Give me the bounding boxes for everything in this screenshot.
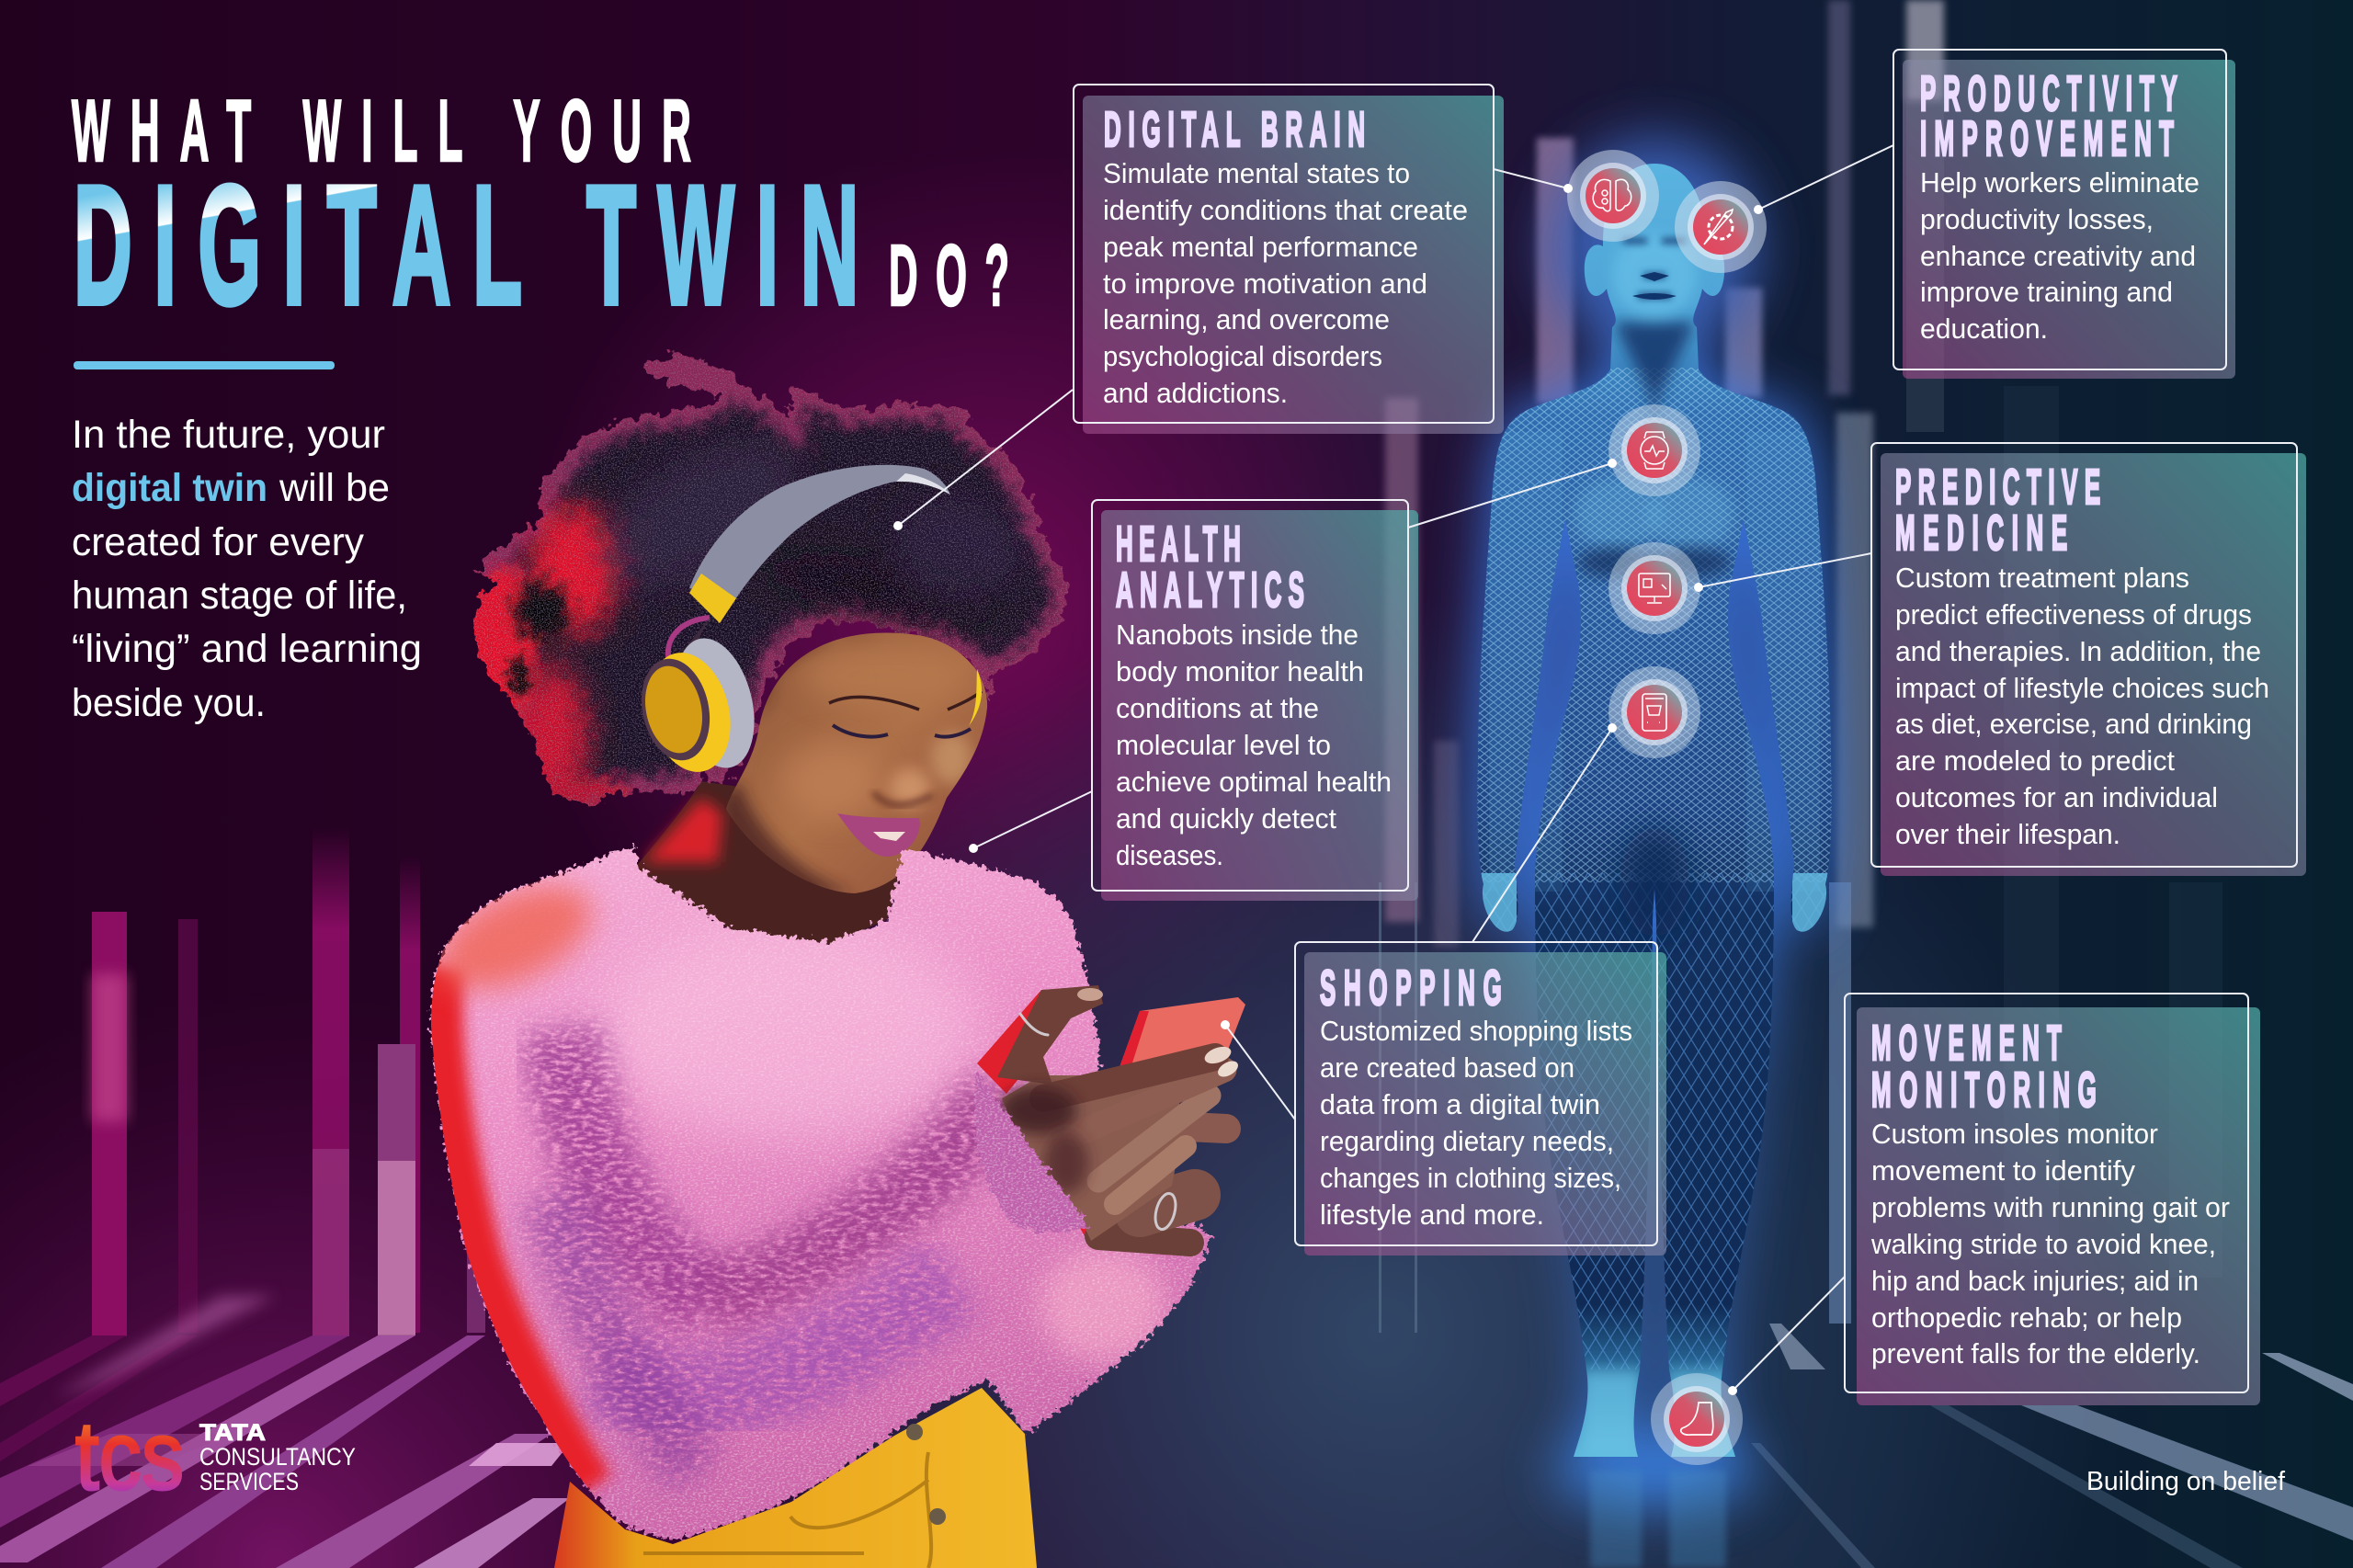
sweater shading xyxy=(422,864,1002,1489)
heading: movement monitoring: MONITORING xyxy=(1871,1062,2097,1117)
icon node: movement foot xyxy=(1651,1373,1743,1465)
logo wordmark xyxy=(199,1420,356,1495)
neck xyxy=(634,781,905,945)
eyebrows xyxy=(829,691,982,710)
text: predictive medicine: are modeled to predict xyxy=(1895,744,2175,777)
text: health analytics: and quickly detect xyxy=(1116,802,1336,835)
face xyxy=(726,632,987,893)
text: movement monitoring: orthopedic rehab; or help xyxy=(1871,1301,2182,1334)
text: movement monitoring: problems with running gait or xyxy=(1871,1191,2230,1223)
panel: predictive medicine xyxy=(1871,443,2306,876)
heading: predictive medicine: PREDICTIVE xyxy=(1895,460,2100,514)
text: predictive medicine: as diet, exercise, and drinking xyxy=(1895,708,2252,740)
jeans xyxy=(554,1388,1037,1568)
text: shopping: are created based on xyxy=(1320,1051,1574,1084)
icon node: digital brain xyxy=(1567,150,1659,242)
icon node: predictive medicine xyxy=(1608,542,1700,634)
hair xyxy=(467,355,1071,807)
text: predictive medicine: predict effectiveness of drugs xyxy=(1895,598,2252,631)
text: digital brain: psychological disorders xyxy=(1103,340,1382,372)
woman with headphones xyxy=(422,355,1245,1568)
text: productivity improvement: improve training and xyxy=(1920,276,2173,308)
text: movement monitoring: Custom insoles monitor xyxy=(1871,1118,2158,1150)
heading: shopping: SHOPPING xyxy=(1320,960,1502,1015)
text: shopping: regarding dietary needs, xyxy=(1320,1125,1614,1157)
icon node: productivity xyxy=(1675,181,1767,273)
title line 2: DIGITAL TWIN xyxy=(74,150,858,340)
intro text: “living” and learning xyxy=(72,627,422,671)
panel: health analytics xyxy=(1092,500,1418,901)
heading: digital brain: DIGITAL BRAIN xyxy=(1104,102,1365,156)
digital twin body figure xyxy=(1452,138,1857,1568)
intro text xyxy=(72,413,422,725)
band yellow tip xyxy=(689,574,736,623)
text: shopping xyxy=(1320,1015,1632,1231)
text: shopping: data from a digital twin xyxy=(1320,1088,1600,1120)
text: health analytics: body monitor health xyxy=(1116,655,1364,687)
text: digital brain: to improve motivation and xyxy=(1103,267,1427,300)
lips xyxy=(837,813,920,857)
icon node: health analytics xyxy=(1608,404,1700,496)
ear cup xyxy=(636,644,743,780)
text: shopping: lifestyle and more. xyxy=(1320,1199,1544,1231)
headband xyxy=(689,465,950,599)
body glow xyxy=(1477,138,1832,1507)
intro text: In the future, your xyxy=(72,413,385,457)
phone xyxy=(977,990,1245,1236)
text: predictive medicine: over their lifespan. xyxy=(1895,818,2120,850)
eyes xyxy=(833,725,971,737)
text: digital brain: identify conditions that create xyxy=(1103,194,1468,226)
logo wordmark: CONSULTANCY xyxy=(199,1443,356,1471)
ear cushion xyxy=(664,630,767,777)
text: health analytics xyxy=(1116,619,1392,871)
panel: movement monitoring xyxy=(1845,994,2260,1405)
heading: health analytics: ANALYTICS xyxy=(1116,562,1304,617)
text: predictive medicine: Custom treatment plans xyxy=(1895,562,2189,594)
heading: predictive medicine: MEDICINE xyxy=(1895,506,2067,560)
text: movement monitoring: hip and back injuries; aid in xyxy=(1871,1265,2199,1297)
heading: productivity improvement: PRODUCTIVITY xyxy=(1920,66,2177,120)
intro text: will be xyxy=(278,466,390,510)
intro text: digital twin xyxy=(72,466,267,510)
panel: productivity improvement xyxy=(1893,50,2235,379)
right floor stripes xyxy=(1751,1324,2353,1568)
cuff xyxy=(973,1071,1089,1232)
text: digital brain xyxy=(1103,157,1468,409)
logo wordmark: TATA xyxy=(199,1420,266,1446)
heading: productivity improvement xyxy=(1920,66,2177,165)
text: predictive medicine: outcomes for an individual xyxy=(1895,781,2218,813)
yellow far earcup xyxy=(969,669,982,726)
text: predictive medicine: impact of lifestyle choices such xyxy=(1895,672,2269,704)
text: productivity improvement xyxy=(1920,166,2200,345)
text: shopping: Customized shopping lists xyxy=(1320,1015,1632,1047)
text: productivity improvement: enhance creativity and xyxy=(1920,240,2196,272)
heading: productivity improvement: IMPROVEMENT xyxy=(1920,111,2174,165)
heading: movement monitoring: MOVEMENT xyxy=(1871,1016,2062,1070)
text: health analytics: conditions at the xyxy=(1116,692,1319,724)
sweater xyxy=(431,846,1211,1540)
text: productivity improvement: education. xyxy=(1920,312,2048,345)
hand xyxy=(997,985,1241,1243)
text: digital brain: Simulate mental states to xyxy=(1103,157,1410,189)
intro text: human stage of life, xyxy=(72,574,407,618)
body mesh xyxy=(1477,164,1832,1457)
text: predictive medicine xyxy=(1895,562,2269,850)
hinge xyxy=(668,618,710,662)
intro text: beside you. xyxy=(72,681,266,725)
heading: health analytics xyxy=(1116,517,1304,617)
text: digital brain: learning, and overcome xyxy=(1103,303,1390,335)
text: shopping: changes in clothing sizes, xyxy=(1320,1162,1621,1194)
text: productivity improvement: productivity losses, xyxy=(1920,203,2154,235)
icon node: shopping xyxy=(1608,666,1700,758)
heading: movement monitoring xyxy=(1871,1016,2097,1117)
text: movement monitoring: movement to identify xyxy=(1871,1154,2135,1187)
panel: shopping xyxy=(1295,942,1666,1256)
text: health analytics: molecular level to xyxy=(1116,729,1331,761)
title line 3: DO? xyxy=(889,226,1009,324)
text: health analytics: diseases. xyxy=(1116,839,1223,871)
title underline xyxy=(74,361,335,369)
text: movement monitoring xyxy=(1870,1118,2230,1369)
title xyxy=(72,81,1009,340)
text: movement monitoring: walking stride to avoid knee, xyxy=(1870,1228,2216,1260)
headphones xyxy=(632,465,950,780)
text: digital brain: peak mental performance xyxy=(1103,231,1418,263)
logo wordmark: SERVICES xyxy=(199,1468,299,1495)
logo: tcs xyxy=(75,1402,356,1510)
left floor stripes xyxy=(0,1296,570,1568)
panel: digital brain xyxy=(1074,85,1504,434)
body reflection xyxy=(1590,1471,1726,1568)
text: health analytics: achieve optimal health xyxy=(1116,766,1392,798)
nose xyxy=(873,792,933,805)
text: health analytics: Nanobots inside the xyxy=(1116,619,1358,651)
text: predictive medicine: and therapies. In addition, the xyxy=(1895,635,2261,667)
leader lines xyxy=(893,145,1893,1395)
intro text: created for every xyxy=(72,520,364,564)
left vertical light bars xyxy=(92,827,485,1336)
text: movement monitoring: prevent falls for the elderly. xyxy=(1871,1337,2200,1369)
heading: predictive medicine xyxy=(1895,460,2100,560)
title line 1: WHAT WILL YOUR xyxy=(72,81,691,180)
tagline: Building on belief xyxy=(2086,1467,2286,1496)
text: digital brain: and addictions. xyxy=(1103,377,1288,409)
right vertical light bars xyxy=(1379,0,2222,1333)
text: productivity improvement: Help workers eliminate xyxy=(1920,166,2200,199)
logo mark: tcs xyxy=(75,1402,184,1510)
heading: health analytics: HEALTH xyxy=(1116,517,1241,571)
